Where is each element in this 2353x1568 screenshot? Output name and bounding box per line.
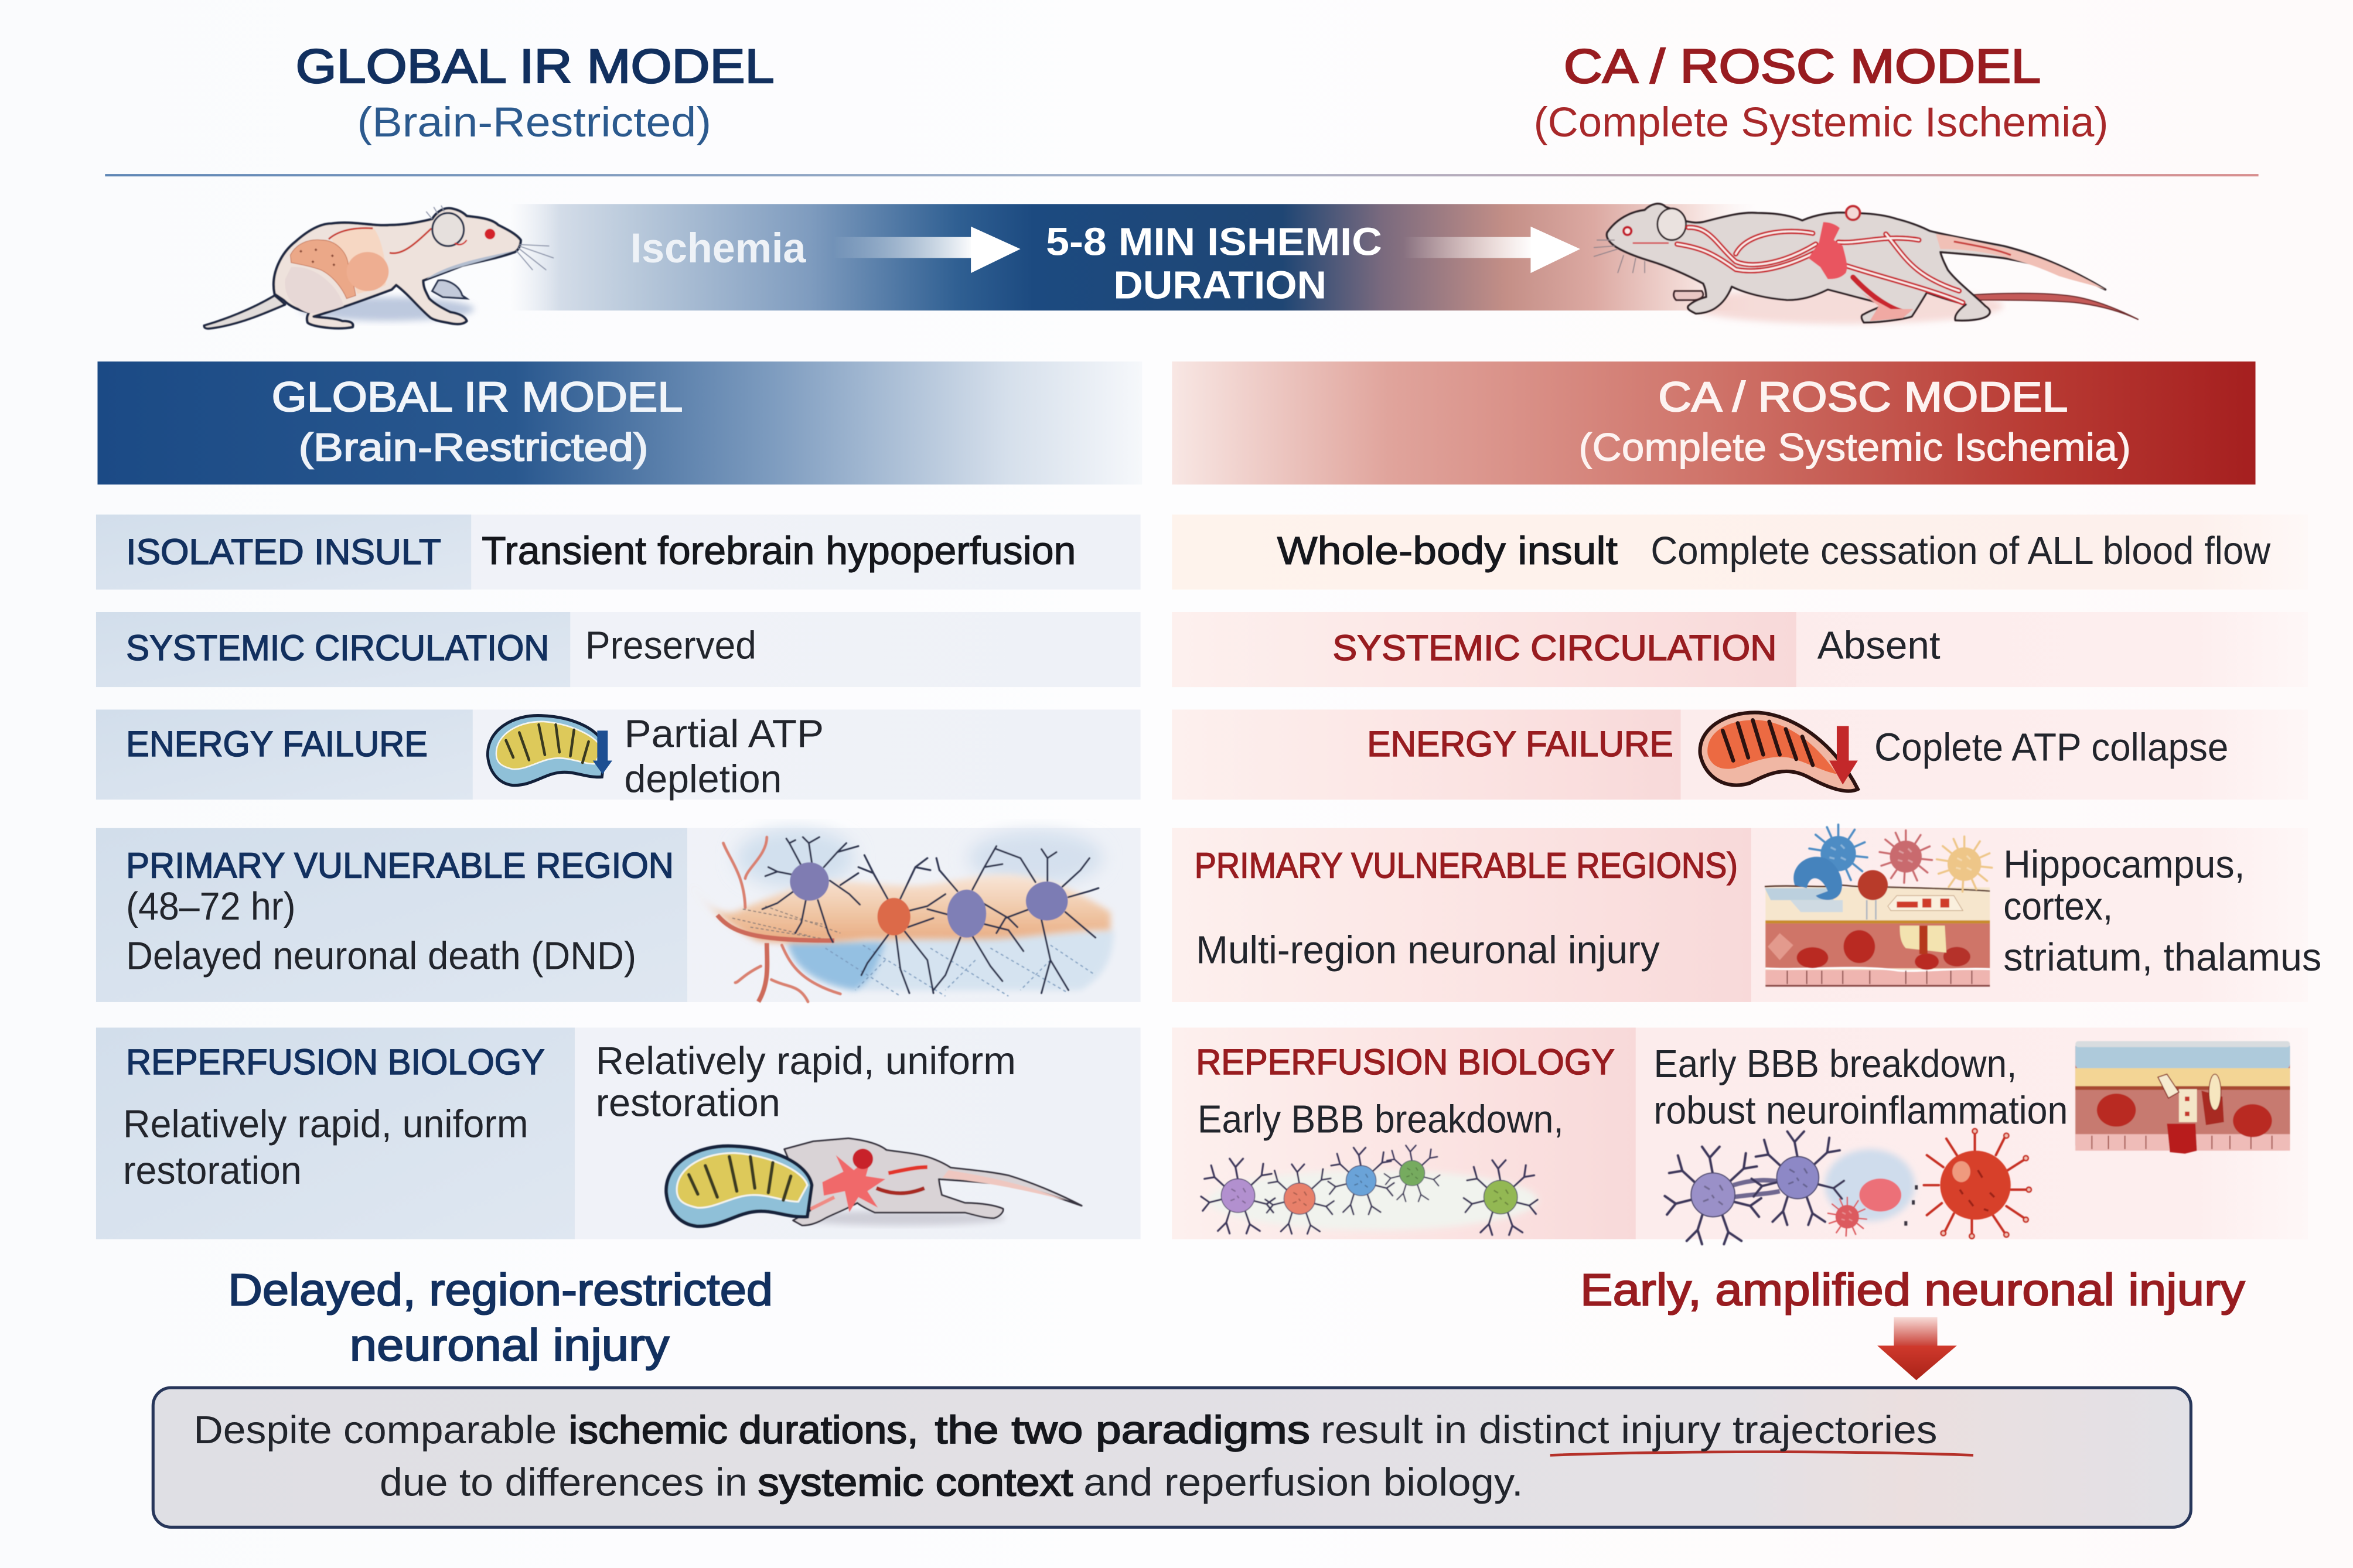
outcome: global IR xyxy=(228,1265,773,1371)
row: isolated insult (left): Transient forebrain hypoperfusion xyxy=(482,530,1076,573)
icon: rat with systemic vascular ischemia xyxy=(1594,204,2139,324)
row: energy failure (left) xyxy=(96,709,1141,801)
row: whole-body insult (right): Whole-body insult xyxy=(1277,530,1618,573)
conclusion box: Despite comparable xyxy=(193,1409,557,1452)
row: energy failure (right): Coplete ATP collapse xyxy=(1874,726,2228,770)
row: energy failure (left): depletion xyxy=(624,757,782,801)
row: whole-body insult (right): Complete cessation of ALL blood flow xyxy=(1650,530,2271,573)
outcome: global IR: neuronal injury xyxy=(350,1320,670,1371)
panel header: CA / ROSC: (Complete Systemic Ischemia) xyxy=(1578,426,2131,469)
label: ischemic duration: DURATION xyxy=(1113,264,1326,308)
row: reperfusion biology (left): REPERFUSION BIOLOGY xyxy=(126,1042,545,1082)
title: CA / ROSC model xyxy=(1534,40,2109,146)
icon: rat with brain-restricted ischemia xyxy=(204,206,554,329)
illustration: blood-brain barrier tissue and glia xyxy=(1765,825,1992,987)
row: energy failure (left): Partial ATP xyxy=(624,712,824,756)
panel header: CA / ROSC xyxy=(1172,361,2256,484)
row: whole-body insult (right) xyxy=(1172,515,2308,590)
illustration: activated microglia xyxy=(1665,1129,2031,1244)
conclusion box: ischemic durations, xyxy=(569,1409,918,1452)
conclusion box: systemic context xyxy=(758,1461,1073,1505)
panel header: CA / ROSC: CA / ROSC MODEL xyxy=(1658,374,2068,421)
row: primary vulnerable regions (right): PRIMARY VULNERABLE REGIONS) xyxy=(1195,845,1738,886)
row: energy failure (right) xyxy=(1172,709,2308,800)
ischemia timeline band xyxy=(510,204,1756,310)
row: energy failure (left): ENERGY FAILURE xyxy=(126,724,428,764)
row: reperfusion biology (right): robust neuroinflammation xyxy=(1653,1089,2068,1132)
title: global IR model: (Brain-Restricted) xyxy=(357,99,711,146)
title: global IR model xyxy=(296,40,775,146)
illustration: rat with mitochondrion xyxy=(666,1138,1082,1227)
label: ischemic duration: 5-8 MIN ISHEMIC xyxy=(1046,220,1382,264)
illustration: BBB breach xyxy=(2075,1041,2290,1154)
conclusion box xyxy=(153,1388,2191,1527)
conclusion box: the two paradigms xyxy=(935,1409,1310,1452)
row: systemic circulation (left) xyxy=(96,612,1141,687)
illustration: neurons over tissue xyxy=(692,828,1113,1002)
conclusion box: result in distinct injury trajectories xyxy=(1321,1409,1938,1452)
row: primary vulnerable region (left) xyxy=(96,828,1141,1002)
row: reperfusion biology (left): Relatively rapid, uniform xyxy=(596,1040,1016,1083)
outcome: global IR: Delayed, region-restricted xyxy=(228,1265,773,1315)
row: reperfusion biology (left) xyxy=(96,1027,1141,1239)
row: reperfusion biology (right) xyxy=(1172,1027,2308,1244)
row: primary vulnerable region (left): PRIMARY VULNERABLE REGION xyxy=(126,845,674,886)
arrow: ischemia to duration xyxy=(833,227,1021,273)
icon: collapsing mitochondrion with down arrow xyxy=(1700,712,1858,791)
row: reperfusion biology (left): restoration xyxy=(123,1149,302,1193)
row: primary vulnerable region (left): (48–72 hr) xyxy=(126,885,296,928)
panel header: global IR: (Brain-Restricted) xyxy=(299,426,648,469)
conclusion box: and reperfusion biology. xyxy=(1083,1461,1523,1505)
row: reperfusion biology (left): restoration xyxy=(596,1082,780,1125)
arrow: outcome to conclusion xyxy=(1877,1317,1957,1380)
illustration: glial cells xyxy=(1201,1146,1538,1235)
row: isolated insult (left) xyxy=(96,515,1141,590)
row: systemic circulation (right): Absent xyxy=(1817,624,1941,667)
row: energy failure (right): ENERGY FAILURE xyxy=(1367,724,1673,764)
label: ischemic duration xyxy=(1046,220,1382,308)
row: reperfusion biology (right): Early BBB breakdown, xyxy=(1653,1043,2017,1086)
row: reperfusion biology (right): Early BBB breakdown, xyxy=(1198,1098,1564,1142)
row: systemic circulation (left): Preserved xyxy=(585,624,756,667)
row: reperfusion biology (left): Relatively rapid, uniform xyxy=(123,1102,528,1146)
row: systemic circulation (right) xyxy=(1172,612,2308,687)
row: primary vulnerable region (left): Delayed neuronal death (DND) xyxy=(126,935,636,978)
row: reperfusion biology (right): REPERFUSION BIOLOGY xyxy=(1196,1042,1615,1082)
panel header: global IR: GLOBAL IR MODEL xyxy=(272,374,683,421)
outcome: CA / ROSC: Early, amplified neuronal injury xyxy=(1580,1265,2245,1315)
panel header: global IR xyxy=(97,361,1142,484)
row: primary vulnerable regions (right): striatum, thalamus xyxy=(2003,936,2321,979)
label: ischemia: Ischemia xyxy=(630,225,806,272)
row: primary vulnerable regions (right) xyxy=(1172,825,2321,1002)
icon: mitochondrion with down arrow xyxy=(487,716,612,785)
row: primary vulnerable regions (right): Multi-region neuronal injury xyxy=(1196,928,1660,972)
title: CA / ROSC model: (Complete Systemic Ischemia) xyxy=(1534,99,2109,146)
row: systemic circulation (right): SYSTEMIC CIRCULATION xyxy=(1332,628,1776,668)
conclusion box: due to differences in xyxy=(380,1461,747,1505)
row: primary vulnerable regions (right): cortex, xyxy=(2003,885,2113,928)
row: systemic circulation (left): SYSTEMIC CIRCULATION xyxy=(126,628,549,668)
title: global IR model: GLOBAL IR MODEL xyxy=(296,40,775,93)
row: primary vulnerable regions (right): Hippocampus, xyxy=(2003,843,2245,886)
arrow: duration to CA rat xyxy=(1403,227,1580,273)
row: isolated insult (left): ISOLATED INSULT xyxy=(126,532,441,572)
title: CA / ROSC model: CA / ROSC MODEL xyxy=(1564,40,2041,93)
